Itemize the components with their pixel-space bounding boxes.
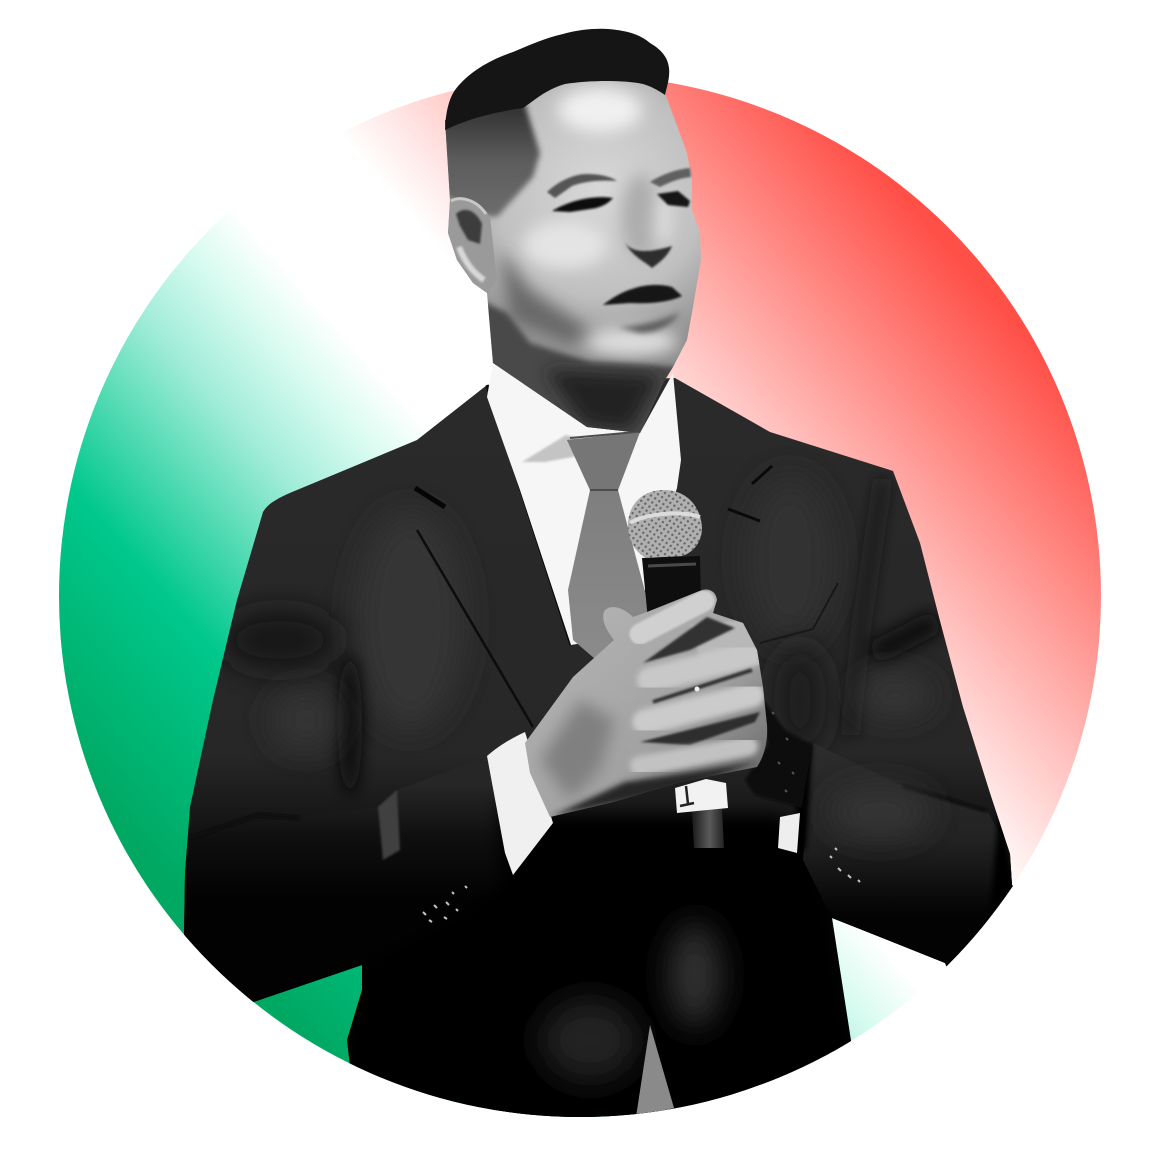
nose highlight	[640, 195, 668, 240]
neck core shadow	[545, 370, 660, 430]
index finger	[640, 601, 704, 634]
sideburn	[440, 98, 540, 217]
collar shadow	[522, 435, 584, 462]
mouth	[603, 285, 682, 305]
gap two	[653, 670, 752, 702]
shirt	[487, 363, 681, 645]
right eyebrow	[650, 168, 691, 187]
hair	[445, 29, 669, 130]
left sleeve buttons	[423, 848, 860, 922]
cheek shadow	[500, 250, 590, 345]
under-brow shadow	[622, 175, 658, 255]
cheek highlight	[523, 221, 607, 269]
lower lip shadow	[618, 312, 680, 333]
back of hand shading	[540, 700, 615, 800]
hand	[525, 589, 767, 817]
microphone label	[675, 779, 728, 813]
upper knuckle	[690, 620, 762, 665]
person	[150, 29, 1030, 1140]
nose shadow	[625, 243, 672, 268]
microphone lower handle	[692, 808, 724, 848]
ring finger	[645, 695, 752, 722]
left cuff	[487, 732, 553, 875]
finger gap	[643, 617, 735, 663]
right eye	[657, 191, 690, 207]
trouser gap	[636, 1025, 674, 1117]
middle finger	[650, 655, 748, 680]
chin highlight	[586, 328, 678, 356]
watch	[745, 695, 812, 808]
left lapel notch	[415, 488, 445, 507]
suit jacket	[150, 378, 1030, 1140]
microphone body	[642, 556, 701, 620]
right lapel notch	[728, 466, 772, 521]
left lapel seam	[417, 530, 533, 727]
ring	[694, 686, 700, 692]
left eyebrow	[547, 174, 617, 198]
right cuff	[778, 813, 800, 853]
left lapel inner edge	[487, 385, 571, 645]
neck and face	[445, 81, 701, 433]
tie	[567, 432, 650, 665]
forehead highlight	[558, 88, 642, 132]
little finger	[640, 746, 748, 766]
microphone head	[628, 490, 702, 558]
breast pocket	[760, 583, 838, 643]
gap three	[640, 712, 760, 745]
neck shadow	[488, 300, 674, 433]
ear	[448, 198, 497, 293]
left eye	[552, 197, 613, 212]
lower hand shadow	[550, 762, 757, 817]
